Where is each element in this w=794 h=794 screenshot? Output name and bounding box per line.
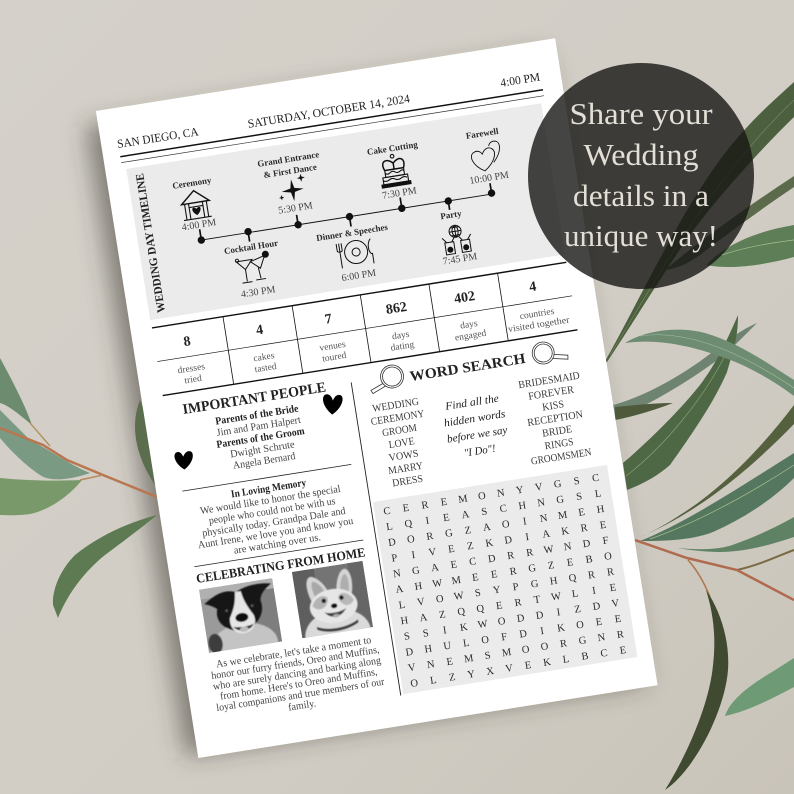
event: cocktail hour: Cocktail Hour xyxy=(223,238,279,256)
text block: in loving memory: We would like to honor the special xyxy=(199,484,341,517)
event: ceremony xyxy=(172,175,219,234)
letter grid xyxy=(373,465,637,694)
word list right xyxy=(518,371,593,468)
photo: corgi xyxy=(292,560,373,638)
letter grid: DORGZAOINMEH xyxy=(387,504,606,549)
panel: important people xyxy=(165,377,352,481)
text block: in loving memory: In Loving Memory xyxy=(230,478,308,501)
text block: in loving memory: people who could not be with us xyxy=(208,496,336,527)
instructions: Find all the xyxy=(443,393,500,413)
event: farewell: Farewell xyxy=(465,126,500,141)
panel: wedding day timeline xyxy=(126,103,565,320)
photo: border collie xyxy=(199,578,282,653)
masthead: SATURDAY, OCTOBER 14, 2024 xyxy=(247,91,411,131)
letter grid: NGAECDRRWNDF xyxy=(392,535,610,580)
newspaper sheet xyxy=(96,38,658,758)
text block: in loving memory: Aunt Irene, we love you and know you xyxy=(197,516,355,551)
icon: heart right xyxy=(322,394,343,415)
event: farewell xyxy=(462,125,510,187)
event: farewell: 10:00 PM xyxy=(469,170,510,187)
letter grid: DHULOFDIKOEE xyxy=(405,614,622,659)
letter grid: PIVEZKDIAKRE xyxy=(391,520,607,565)
instructions: "I Do"! xyxy=(463,443,497,460)
letter grid: LQIEASCHNGSL xyxy=(386,488,602,533)
stat: days dating: 862 xyxy=(385,300,408,318)
event: dinner and speeches xyxy=(315,222,396,287)
word list left: LOVE xyxy=(388,436,415,451)
instructions xyxy=(441,392,511,462)
stat: cakes tasted: 4 xyxy=(255,323,264,339)
panel: important people: Parents of the Groom xyxy=(216,426,306,451)
word list right: RINGS xyxy=(544,437,575,452)
heading: WORD SEARCH xyxy=(409,351,527,385)
eucalyptus leaves: right xyxy=(603,82,794,790)
word list left: DRESS xyxy=(391,474,424,489)
event: cake cutting xyxy=(366,139,426,203)
instructions: hidden words xyxy=(443,408,506,430)
stat: venues toured: toured xyxy=(322,351,347,365)
stat: days engaged: 402 xyxy=(453,289,476,307)
stat: days dating: dating xyxy=(390,340,415,354)
masthead: 4:00 PM xyxy=(499,70,541,90)
word list right: RECEPTION xyxy=(527,409,584,429)
panel: important people: Dwight Schrute xyxy=(229,439,296,460)
stat: countries visited together: countries xyxy=(519,307,555,322)
stats table xyxy=(152,262,578,396)
panel: important people: Angela Bernard xyxy=(232,451,297,472)
letter grid: SSIKWODDIZDV xyxy=(403,598,621,643)
eucalyptus leaves: left xyxy=(0,358,157,618)
stat: dresses tried xyxy=(172,332,208,387)
instructions: before we say xyxy=(446,424,508,446)
article text: from home. Here's to Oreo and Muffins, xyxy=(219,667,378,703)
event: cocktail hour xyxy=(223,238,286,302)
stat: days engaged: days xyxy=(460,319,479,332)
word list right: FOREVER xyxy=(528,385,575,403)
letter grid: LVOWSYPGHQRR xyxy=(398,567,615,612)
stat: days engaged: engaged xyxy=(454,329,487,344)
callout: dark circle: Wedding xyxy=(584,137,698,172)
word list right: BRIDESMAID xyxy=(518,371,581,391)
stat: venues toured: venues xyxy=(319,340,347,354)
event: grand entrance and first dance: Grand Entrance xyxy=(257,149,320,169)
stat: countries visited together xyxy=(501,275,571,335)
event: cake cutting: Cake Cutting xyxy=(366,139,419,157)
stat: days engaged xyxy=(448,288,487,344)
stat: countries visited together: visited together xyxy=(507,315,571,335)
paper shadow xyxy=(86,53,645,756)
timeline line and pins xyxy=(196,183,496,250)
event: grand entrance and first dance: 5:30 PM xyxy=(278,200,314,217)
letter grid: VNEMSMOORGNR xyxy=(407,629,625,674)
article text: family. xyxy=(287,698,317,714)
panel: important people: Jim and Pam Halpert xyxy=(216,415,302,439)
word list left xyxy=(368,396,436,491)
word list left: GROOM xyxy=(382,423,418,439)
word list left: WEDDING xyxy=(372,397,420,415)
event: grand entrance and first dance: & First Dance xyxy=(263,162,317,180)
event: dinner and speeches: 6:00 PM xyxy=(341,268,377,284)
vertical heading: WEDDING DAY TIMELINE xyxy=(134,172,168,314)
callout: dark circle: details in a xyxy=(573,178,709,213)
stat: days dating: days xyxy=(391,330,410,342)
callout: dark circle: Share your xyxy=(570,96,713,131)
word list right: BRIDE xyxy=(542,424,573,440)
event: cake cutting: 7:30 PM xyxy=(381,185,418,202)
column divider xyxy=(351,382,401,696)
article text: honor our furry friends, Oreo and Muffins, xyxy=(211,645,380,682)
panel: important people: Parents of the Bride xyxy=(215,404,300,428)
stat: dresses tried: dresses xyxy=(177,362,206,376)
letter grid: CEREMONYVGSC xyxy=(383,473,600,518)
callout: dark circle: unique way! xyxy=(564,218,718,253)
word list left: MARRY xyxy=(388,461,424,477)
stat: dresses tried: tried xyxy=(184,374,203,386)
word list right: KISS xyxy=(541,399,565,414)
article text: As we celebrate, let's take a moment to xyxy=(215,635,372,670)
panel: celebrating from home: CELEBRATING FROM HOME xyxy=(195,544,366,586)
icon: magnifier left xyxy=(368,363,406,394)
panel: word search xyxy=(352,334,637,694)
article text xyxy=(209,634,388,725)
masthead: SAN DIEGO, CA xyxy=(116,124,200,151)
letter grid: OLZYXVEKLBCE xyxy=(410,645,627,690)
stat: cakes tasted: tasted xyxy=(254,362,278,375)
word list left: CEREMONY xyxy=(370,409,426,428)
stat: dresses tried: 8 xyxy=(182,334,192,350)
masthead xyxy=(116,70,544,163)
event: party: Party xyxy=(440,208,463,221)
letter grid: AHWMEERGZEBO xyxy=(395,551,613,596)
text block: in loving memory xyxy=(190,471,356,562)
article text: who are surely dancing and barking along xyxy=(212,655,383,693)
event: cocktail hour: 4:30 PM xyxy=(240,284,276,300)
text block: in loving memory: physically today. Grandpa Dale and xyxy=(201,506,347,539)
event: ceremony: 4:00 PM xyxy=(181,217,217,233)
icon: magnifier right xyxy=(531,338,569,366)
stat: cakes tasted xyxy=(248,321,278,375)
callout: dark circle xyxy=(528,63,754,289)
event: dinner and speeches: Dinner & Speeches xyxy=(315,222,389,243)
event: grand entrance and first dance xyxy=(257,149,328,219)
panel: important people: IMPORTANT PEOPLE xyxy=(181,380,327,418)
word list left: VOWS xyxy=(388,449,419,464)
stat: countries visited together: 4 xyxy=(528,279,537,295)
event: ceremony: Ceremony xyxy=(172,175,212,191)
icon: heart left xyxy=(174,451,194,470)
word list right: GROOMSMEN xyxy=(530,447,593,468)
stat: cakes tasted: cakes xyxy=(253,351,276,364)
stat: venues toured: 7 xyxy=(324,312,333,328)
letter grid: HAZQQERTWLIE xyxy=(400,582,617,627)
panel: celebrating from home xyxy=(195,544,388,725)
stat: venues toured xyxy=(314,310,348,365)
article text: loyal companions and true members of our xyxy=(216,677,386,714)
text block: in loving memory: are watching over us. xyxy=(233,532,322,557)
stat: days dating xyxy=(384,300,415,354)
event: party xyxy=(435,207,478,268)
event: party: 7:45 PM xyxy=(442,251,478,268)
